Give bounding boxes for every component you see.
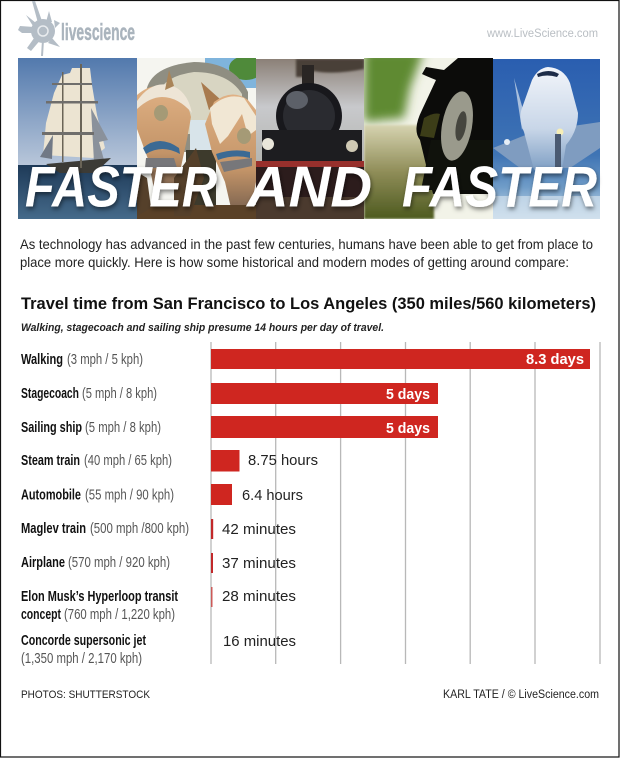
row: automobile: (55 mph / 90 kph) [85,488,174,504]
row: automobile: 6.4 hours [242,487,303,504]
headline [25,155,597,220]
row: sailing ship [21,416,438,438]
row: stagecoach: Stagecoach [21,386,79,402]
row: sailing ship: 5 days [386,420,430,437]
row: concorde: (1,350 mph / 2,170 kph) [21,651,142,667]
photo: airplane [493,59,600,219]
photo: sailing ship [18,58,137,219]
row: concorde: Concorde supersonic jet [21,633,146,649]
row: sailing ship: Sailing ship [21,420,82,436]
row: hyperloop [21,587,296,623]
photo: stagecoach horses [137,56,263,219]
row: maglev train [21,519,296,539]
headline: FASTER [25,155,217,220]
intro text: place more quickly. Here is how some historical and modern modes of getting around compare: [20,254,569,270]
row: stagecoach [21,383,438,404]
photo: steam train [256,59,364,219]
row: walking [21,349,590,369]
chart title: Travel time from San Francisco to Los Angeles (350 miles/560 kilometers) [21,294,596,313]
photo: speeding automobile [364,50,493,219]
row: walking: Walking [21,352,63,368]
row: hyperloop: 28 minutes [222,588,296,605]
bar chart [21,342,600,667]
row: automobile: Automobile [21,488,81,504]
row: automobile [21,484,303,505]
row: steam train [21,450,318,472]
row: walking: (3 mph / 5 kph) [67,352,143,368]
logo: LiveScience [18,1,135,56]
headline: AND [245,155,372,220]
row: hyperloop: concept [21,607,61,623]
chart note: Walking, stagecoach and sailing ship presume 14 hours per day of travel. [21,322,384,334]
row: sailing ship: (5 mph / 8 kph) [85,420,161,436]
intro text: As technology has advanced in the past few centuries, humans have been able to get from place to [20,236,593,252]
row: airplane: (570 mph / 920 kph) [68,555,170,571]
row: steam train: 8.75 hours [248,452,318,469]
photo credit: PHOTOS: SHUTTERSTOCK [21,689,151,701]
headline: FASTER [402,155,597,220]
row: airplane [21,553,296,573]
row: steam train: Steam train [21,453,80,469]
row: concorde [21,633,296,667]
row: maglev train: (500 mph /800 kph) [90,521,189,537]
row: stagecoach: (5 mph / 8 kph) [82,386,157,402]
row: maglev train: Maglev train [21,521,86,537]
row: hyperloop: (760 mph / 1,220 kph) [64,607,175,623]
row: airplane: 37 minutes [222,555,296,572]
row: airplane: Airplane [21,555,65,571]
row: steam train: (40 mph / 65 kph) [84,453,172,469]
row: hyperloop: Elon Musk’s Hyperloop transit [21,589,178,605]
logo: LiveScience: livescience [61,19,135,45]
website url: www.LiveScience.com [486,28,598,40]
intro text [20,236,593,270]
row: walking: 8.3 days [526,351,584,368]
row: maglev train: 42 minutes [222,521,296,538]
author credit: KARL TATE / © LiveScience.com [443,689,599,701]
row: stagecoach: 5 days [386,386,430,403]
row: concorde: 16 minutes [223,633,296,650]
